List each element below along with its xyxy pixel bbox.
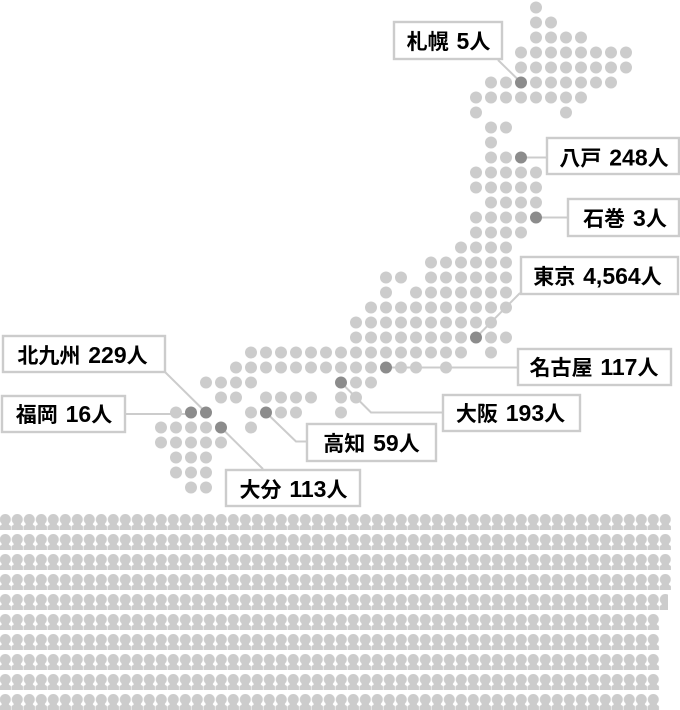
label: Kitakyushu: 北九州 229人 xyxy=(17,342,148,368)
label: Oita xyxy=(226,470,360,506)
highlighted city dots xyxy=(185,76,542,434)
dots: Shikoku xyxy=(245,392,317,434)
label: Kochi: 高知 59人 xyxy=(323,430,420,456)
label: Ishinomaki: 石巻 3人 xyxy=(583,205,667,231)
label: Ishinomaki xyxy=(568,199,679,236)
label: Kitakyushu xyxy=(3,336,165,372)
dots: Kyushu xyxy=(155,406,227,494)
label: Nagoya xyxy=(518,349,671,385)
label: Oita: 大分 113人 xyxy=(240,476,347,502)
label: Kochi xyxy=(307,424,436,461)
label: Hachinohe: 八戸 248人 xyxy=(559,144,669,170)
leader lines xyxy=(126,60,567,469)
label: Tokyo xyxy=(521,257,678,294)
people grid: 4,564 xyxy=(0,514,671,710)
label: Osaka xyxy=(443,395,580,431)
dots: Honshu xyxy=(200,122,542,418)
label: Sapporo xyxy=(394,22,502,59)
label: Sapporo: 札幌 5人 xyxy=(407,28,490,54)
label: Hachinohe xyxy=(547,138,679,174)
dots: Hokkaido xyxy=(470,2,632,118)
label: Tokyo: 東京 4,564人 xyxy=(533,263,662,289)
label: Nagoya: 名古屋 117人 xyxy=(530,354,658,380)
label: Fukuoka: 福岡 16人 xyxy=(16,401,112,427)
label: Fukuoka xyxy=(2,396,125,432)
dot map of Japan xyxy=(155,2,632,494)
label: Osaka: 大阪 193人 xyxy=(456,400,565,426)
